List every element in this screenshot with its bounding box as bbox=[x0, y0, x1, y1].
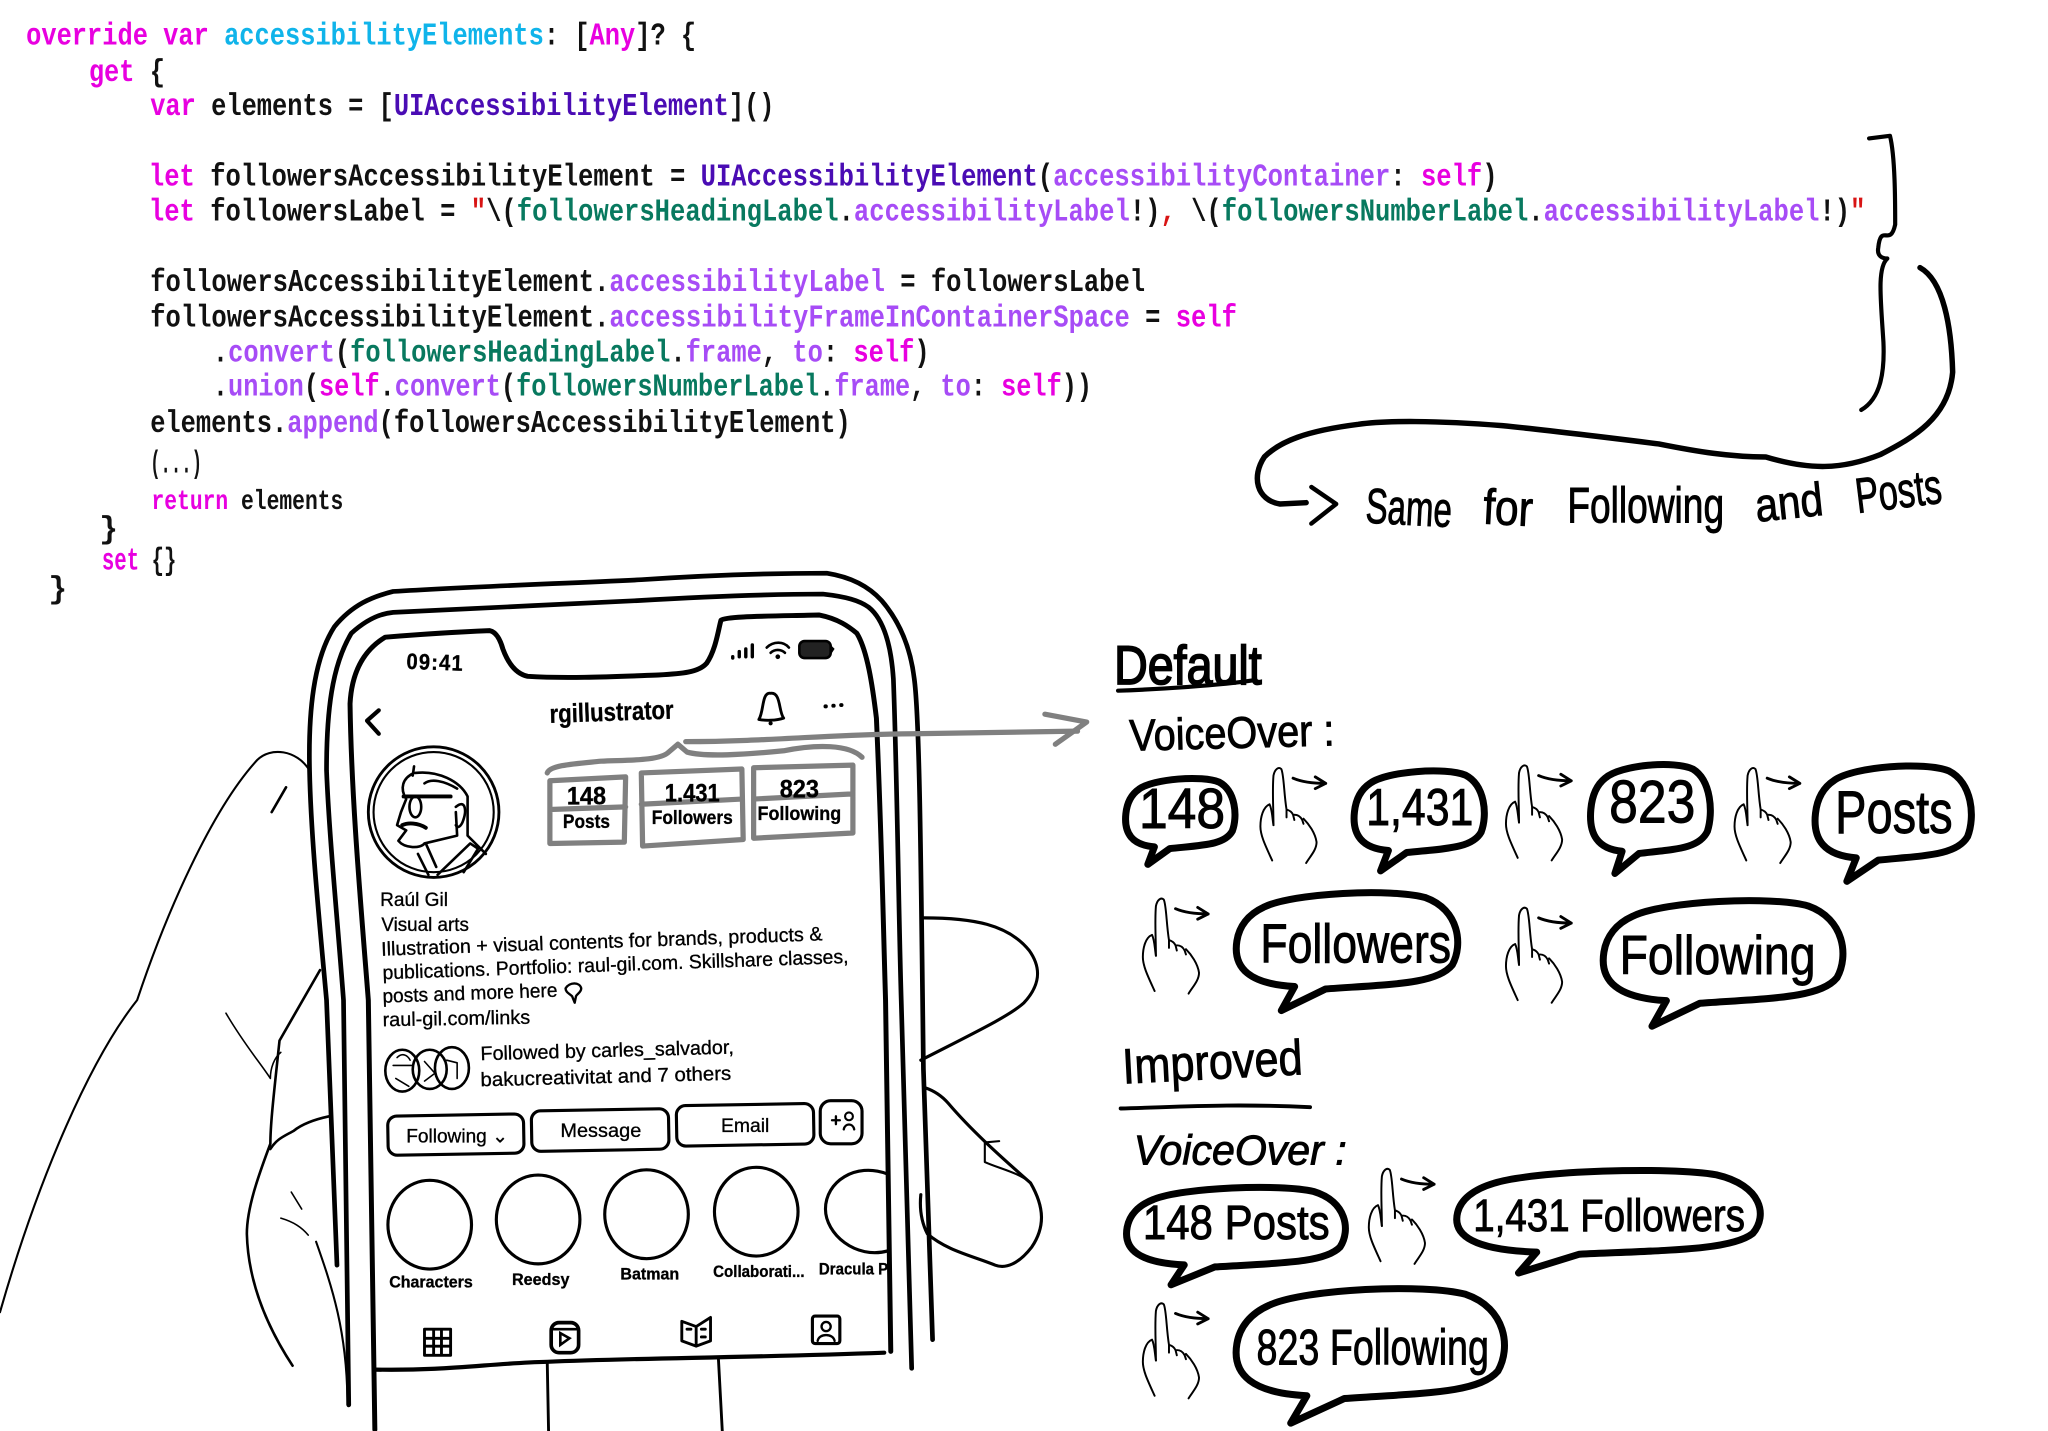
profile avatar bbox=[368, 747, 499, 877]
phone screen bbox=[350, 615, 891, 1431]
highlight: Dracula P bbox=[819, 1170, 888, 1278]
section: Improved bbox=[1121, 1029, 1760, 1423]
code line: accessibilityLabel assignment: followersAccessibilityElement.accessibilityLabel = followersLabel bbox=[150, 265, 1145, 301]
code line: override var: override var accessibilityElements: [Any]? { bbox=[26, 18, 696, 54]
bubble: 1,431 Followers bbox=[1457, 1170, 1760, 1273]
story highlights bbox=[388, 1167, 888, 1291]
bubble: Posts: Posts bbox=[1835, 779, 1953, 846]
code line: get: get { bbox=[89, 55, 165, 91]
heading: Improved: Improved bbox=[1121, 1029, 1304, 1095]
highlight: Dracula P: Dracula P bbox=[819, 1259, 888, 1278]
code line: set: set {} bbox=[102, 543, 176, 579]
handwritten note: Same for Following and Posts: for bbox=[1482, 479, 1534, 537]
header: username: rgillustrator bbox=[549, 695, 674, 729]
code line: return elements: return elements bbox=[152, 486, 343, 518]
stat: followers: 1.431 bbox=[665, 781, 720, 808]
followed by text: bakucreativitat and 7 others bbox=[480, 1063, 732, 1091]
bubble: Posts bbox=[1815, 766, 1971, 881]
bubble: 148 bbox=[1126, 777, 1235, 864]
swipe gesture hand bbox=[1506, 765, 1571, 860]
code line: convert: .convert(followersHeadingLabel.frame, to: self) bbox=[213, 335, 930, 372]
handwritten note: Same for Following and Posts: Posts bbox=[1852, 458, 1945, 524]
stat: followers bbox=[641, 769, 743, 846]
bubble: 148 Posts: 148 Posts bbox=[1143, 1196, 1330, 1250]
section: Default bbox=[1114, 634, 1971, 1026]
header: more dots bbox=[825, 705, 842, 706]
heading: Default: Default bbox=[1114, 634, 1262, 696]
highlight: Reedsy bbox=[496, 1175, 580, 1289]
status bar bbox=[406, 641, 835, 676]
code line: let followersAccessibilityElement: let followersAccessibilityElement = UIAccessibilityElement(accessibilityContainer: self) bbox=[149, 159, 1498, 195]
code block bbox=[26, 18, 1865, 608]
stat: following bbox=[754, 765, 853, 838]
code line: ellipsis: (...) bbox=[150, 447, 202, 483]
curly brace grouping the code bbox=[1861, 136, 1895, 410]
arrow to voiceover section bbox=[686, 714, 1087, 744]
header: back chevron bbox=[367, 710, 379, 734]
followed by text: Followed by carles_salvador, bbox=[480, 1037, 734, 1065]
highlight: Collaborati...: Collaborati... bbox=[713, 1262, 805, 1281]
label: Voice Over: VoiceOver : bbox=[1134, 1127, 1347, 1174]
highlight: Reedsy: Reedsy bbox=[512, 1270, 570, 1289]
stat: posts: 148 bbox=[567, 783, 606, 810]
highlight: Batman bbox=[605, 1170, 688, 1284]
profile bio text: publications. Portfolio: raul-gil.com. Skillshare classes, bbox=[382, 946, 849, 984]
bubble: 148: 148 bbox=[1139, 777, 1225, 840]
handwritten note: Same for Following and Posts bbox=[1364, 458, 1945, 538]
code line: elements.append: elements.append(followersAccessibilityElement) bbox=[150, 406, 851, 442]
stat: followers: Followers bbox=[652, 807, 733, 829]
code line: union: .union(self.convert(followersNumberLabel.frame, to: self)) bbox=[213, 369, 1092, 406]
button: Email bbox=[676, 1103, 814, 1146]
bubble: 823 Following: 823 Following bbox=[1256, 1319, 1489, 1375]
bubble: Following: Following bbox=[1620, 924, 1816, 986]
profile bio text: Raúl Gil bbox=[380, 889, 448, 911]
tab icon: guide book bbox=[682, 1317, 711, 1346]
bubble: 148 Posts bbox=[1127, 1187, 1345, 1285]
swipe gesture hand bbox=[1735, 768, 1800, 863]
bubble: 823: 823 bbox=[1609, 769, 1695, 836]
swipe gesture hand bbox=[1260, 768, 1326, 863]
code line: let followersLabel: let followersLabel = "\(followersHeadingLabel.accessibilityLabel!), \(followersNumberLabel.accessibilityLabel!)" bbox=[149, 194, 1865, 231]
tab icon: grid bbox=[424, 1329, 451, 1355]
profile bio text: Illustration + visual contents for brands, products & bbox=[381, 923, 823, 961]
button: add person bbox=[820, 1101, 862, 1144]
swipe gesture hand bbox=[1143, 1303, 1208, 1398]
button: Message bbox=[531, 1109, 669, 1151]
stat: posts: Posts bbox=[563, 811, 610, 833]
profile bio text bbox=[380, 889, 849, 1031]
tab bar icons bbox=[424, 1316, 840, 1355]
handwritten note: Same for Following and Posts: Same bbox=[1364, 478, 1453, 538]
bubble: 823 Following bbox=[1236, 1289, 1504, 1423]
code line: var elements: var elements = [UIAccessibilityElement]() bbox=[150, 89, 775, 125]
stat: following: Following bbox=[758, 803, 841, 825]
bubble: Following bbox=[1603, 901, 1843, 1026]
button: Following: Following ⌄ bbox=[406, 1125, 508, 1147]
header: bell icon bbox=[759, 693, 784, 725]
handwritten note: Same for Following and Posts: and bbox=[1752, 472, 1826, 532]
brace over stats bbox=[547, 744, 862, 773]
label: Voice Over: VoiceOver : bbox=[1129, 706, 1335, 761]
button: Message: Message bbox=[560, 1120, 641, 1142]
tab icon: reels bbox=[551, 1323, 579, 1353]
bubble: Followers: Followers bbox=[1260, 912, 1451, 974]
handwritten note: Same for Following and Posts: Following bbox=[1567, 477, 1724, 533]
bubble: 1,431: 1,431 bbox=[1366, 779, 1473, 837]
swipe gesture hand bbox=[1506, 908, 1571, 1003]
followed by avatars bbox=[385, 1047, 469, 1092]
followed by text bbox=[480, 1037, 734, 1091]
profile bio text: raul-gil.com/links bbox=[382, 1007, 531, 1031]
profile bio text: Visual arts bbox=[381, 914, 469, 936]
code line: final closing brace: } bbox=[48, 573, 67, 608]
profile bio text: posts and more here bbox=[382, 980, 558, 1008]
pointing down hand icon bbox=[566, 983, 581, 1003]
swipe gesture hand bbox=[1143, 899, 1208, 994]
signal, wifi, battery icons bbox=[733, 641, 835, 659]
highlight: Batman: Batman bbox=[620, 1265, 679, 1284]
code line: accessibilityFrameInContainerSpace assignment: followersAccessibilityElement.accessibilityFrameInContainerSpace = self bbox=[150, 300, 1237, 336]
bubble: 823 bbox=[1590, 765, 1710, 873]
tab icon: tagged person bbox=[812, 1316, 840, 1344]
arrow: same for following and posts bbox=[1257, 268, 1953, 524]
phone outline bbox=[309, 573, 933, 1405]
stats highlighted grey boxes bbox=[547, 714, 1087, 846]
hand holding the phone bbox=[0, 752, 1041, 1405]
swipe gesture hand bbox=[1369, 1169, 1434, 1264]
bubble: Followers bbox=[1236, 893, 1458, 1011]
stat: following: 823 bbox=[780, 777, 819, 804]
stat: posts bbox=[550, 777, 626, 843]
button: Following bbox=[388, 1114, 524, 1155]
bubble: 1,431 Followers: 1,431 Followers bbox=[1473, 1190, 1745, 1241]
time: 09:41 bbox=[406, 649, 464, 676]
highlight: Characters bbox=[388, 1180, 473, 1291]
code line: closing brace: } bbox=[99, 513, 118, 548]
highlight: Characters: Characters bbox=[389, 1272, 473, 1291]
button: Email: Email bbox=[721, 1115, 769, 1137]
highlight: Collaborati... bbox=[713, 1167, 805, 1281]
bubble: 1,431 bbox=[1354, 771, 1484, 871]
